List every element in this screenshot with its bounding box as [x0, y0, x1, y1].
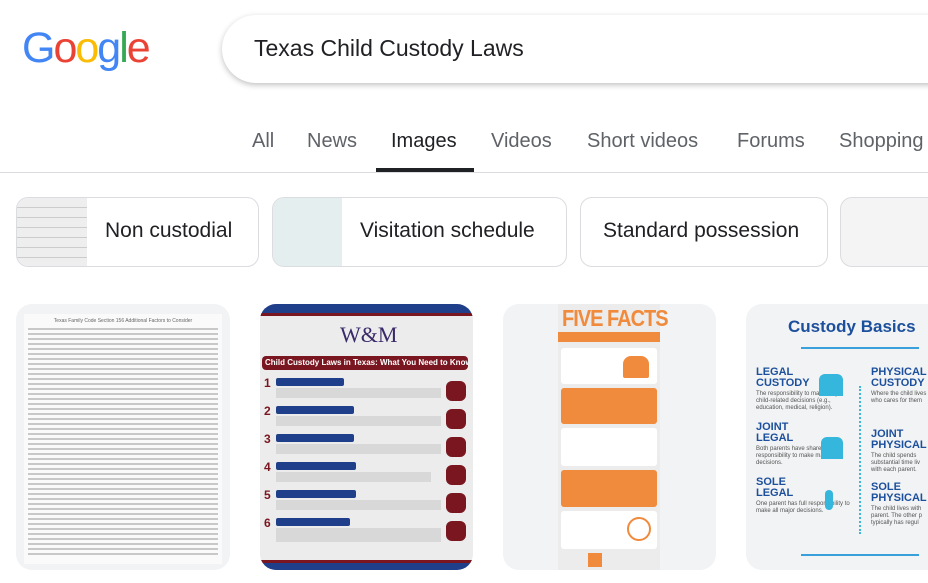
- tabs: Short videos: [587, 130, 698, 152]
- chip: Standard possession: [580, 197, 828, 267]
- numbered list: 4: [264, 460, 271, 474]
- physical column: PHYSICAL: [871, 492, 927, 504]
- physical column: [871, 366, 927, 526]
- card: Custody Basics: [746, 304, 928, 570]
- tabs: [252, 130, 924, 172]
- chip: Visitation schedule: [272, 197, 567, 267]
- legal column: LEGAL: [756, 366, 793, 378]
- physical column: The child spends: [871, 453, 916, 459]
- tabs: Images: [391, 130, 457, 152]
- chip: co-parenting guide: [840, 197, 928, 267]
- chip: Non custodial: [16, 197, 259, 267]
- physical column: Where the child lives: [871, 391, 926, 397]
- legal column: LEGAL: [756, 487, 793, 499]
- chip: Standard possession: Standard possession: [603, 219, 799, 242]
- physical column: substantial time liv: [871, 460, 920, 466]
- numbered list: 3: [264, 432, 271, 446]
- legal column: [756, 366, 850, 514]
- physical column: JOINT: [871, 428, 903, 440]
- logo WM: W&M: [340, 322, 397, 347]
- tabs: All: [252, 130, 274, 152]
- chip: Visitation schedule: Visitation schedule: [360, 219, 535, 242]
- title: FIVE FACTS: [562, 306, 668, 332]
- legal column: JOINT: [756, 421, 788, 433]
- physical column: PHYSICAL: [871, 366, 927, 378]
- tabs: Videos: [491, 130, 552, 152]
- card: Five Facts orange infographic: [503, 304, 716, 570]
- numbered list: 6: [264, 516, 271, 530]
- numbered list: [264, 376, 466, 542]
- physical column: PHYSICAL: [871, 439, 927, 451]
- card: table image: [16, 304, 230, 570]
- tabs: News: [307, 130, 357, 152]
- chip: Non custodial: Non custodial: [105, 219, 232, 242]
- physical column: The child lives with: [871, 506, 921, 512]
- title: Custody Basics: [788, 317, 916, 336]
- tabs: Shopping: [839, 130, 924, 152]
- search box: [222, 15, 928, 83]
- search query: Texas Child Custody Laws: [254, 35, 524, 61]
- physical column: parent. The other p: [871, 513, 922, 519]
- numbered list: 2: [264, 404, 271, 418]
- numbered list: 1: [264, 376, 271, 390]
- card: Child custody laws red infographic: [260, 304, 473, 570]
- numbered list: 5: [264, 488, 271, 502]
- heading bar: [262, 356, 468, 370]
- card: table image: Texas Family Code Section 156 Additional Factors to Consider: [54, 318, 192, 324]
- tabs: Forums: [737, 130, 805, 152]
- legal column: Both parents have shared responsibility to make major decisions.: [756, 446, 830, 466]
- physical column: who cares for them: [871, 398, 922, 404]
- physical column: CUSTODY: [871, 377, 925, 389]
- legal column: CUSTODY: [756, 377, 810, 389]
- legal column: One parent has full responsibility to make all major decisions.: [756, 501, 850, 514]
- legal column: SOLE: [756, 476, 786, 488]
- logo: Google: Google: [22, 24, 149, 72]
- legal column: LEGAL: [756, 432, 793, 444]
- physical column: typically has regul: [871, 520, 919, 526]
- legal column: The responsibility to make major child-related decisions (e.g., education, medical, religion).: [756, 391, 842, 411]
- physical column: with each parent.: [871, 467, 917, 473]
- physical column: SOLE: [871, 481, 901, 493]
